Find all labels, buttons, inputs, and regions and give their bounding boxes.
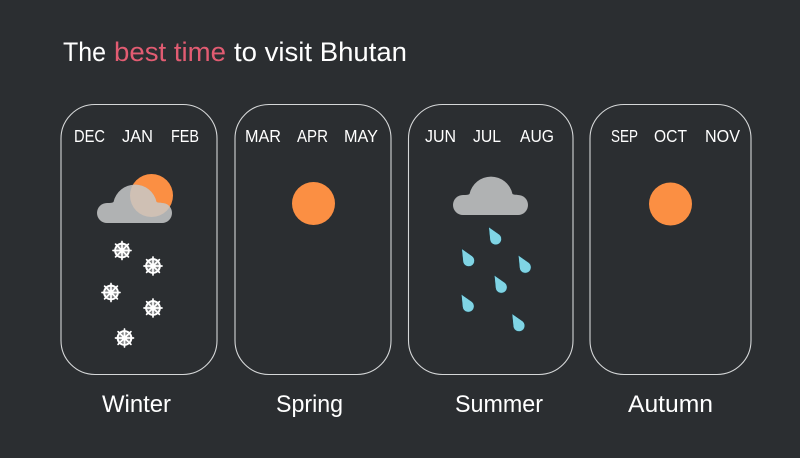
autumn months: NOV bbox=[705, 126, 740, 146]
winter months: FEB bbox=[171, 126, 199, 146]
summer card outline bbox=[408, 104, 573, 374]
spring months: MAR bbox=[245, 126, 281, 146]
summer months: JUL bbox=[473, 126, 501, 146]
icon: rain cloud bbox=[453, 177, 528, 215]
panel: summer bbox=[408, 104, 573, 374]
title: best time bbox=[114, 37, 226, 67]
panel: autumn bbox=[590, 104, 751, 374]
summer months: AUG bbox=[520, 126, 554, 146]
icon: snowflakes bbox=[102, 242, 162, 347]
winter card outline bbox=[61, 104, 217, 374]
title bbox=[63, 37, 407, 67]
autumn months bbox=[611, 126, 740, 146]
summer months: JUN bbox=[425, 126, 456, 146]
label: Summer: Summer bbox=[455, 391, 543, 418]
autumn months: OCT bbox=[654, 126, 687, 146]
icon: sun behind cloud bbox=[97, 174, 173, 223]
icon: sun bbox=[649, 182, 692, 226]
panel: spring bbox=[235, 104, 391, 374]
label: Spring: Spring bbox=[276, 391, 343, 418]
winter months: DEC bbox=[74, 126, 105, 146]
label: Winter: Winter bbox=[102, 391, 171, 418]
winter months: JAN bbox=[122, 126, 153, 146]
spring card outline bbox=[235, 104, 391, 374]
title: to visit Bhutan bbox=[234, 37, 407, 67]
spring months: MAY bbox=[344, 126, 378, 146]
icon: rain drops bbox=[461, 227, 531, 332]
summer months bbox=[425, 126, 554, 146]
panel: winter bbox=[61, 104, 217, 374]
spring months bbox=[245, 126, 378, 146]
icon: sun bbox=[292, 182, 335, 225]
spring months: APR bbox=[297, 126, 328, 146]
autumn months: SEP bbox=[611, 126, 638, 146]
label: Autumn: Autumn bbox=[628, 391, 713, 418]
autumn card outline bbox=[590, 104, 751, 374]
title: The bbox=[63, 37, 106, 67]
winter months bbox=[74, 126, 199, 146]
